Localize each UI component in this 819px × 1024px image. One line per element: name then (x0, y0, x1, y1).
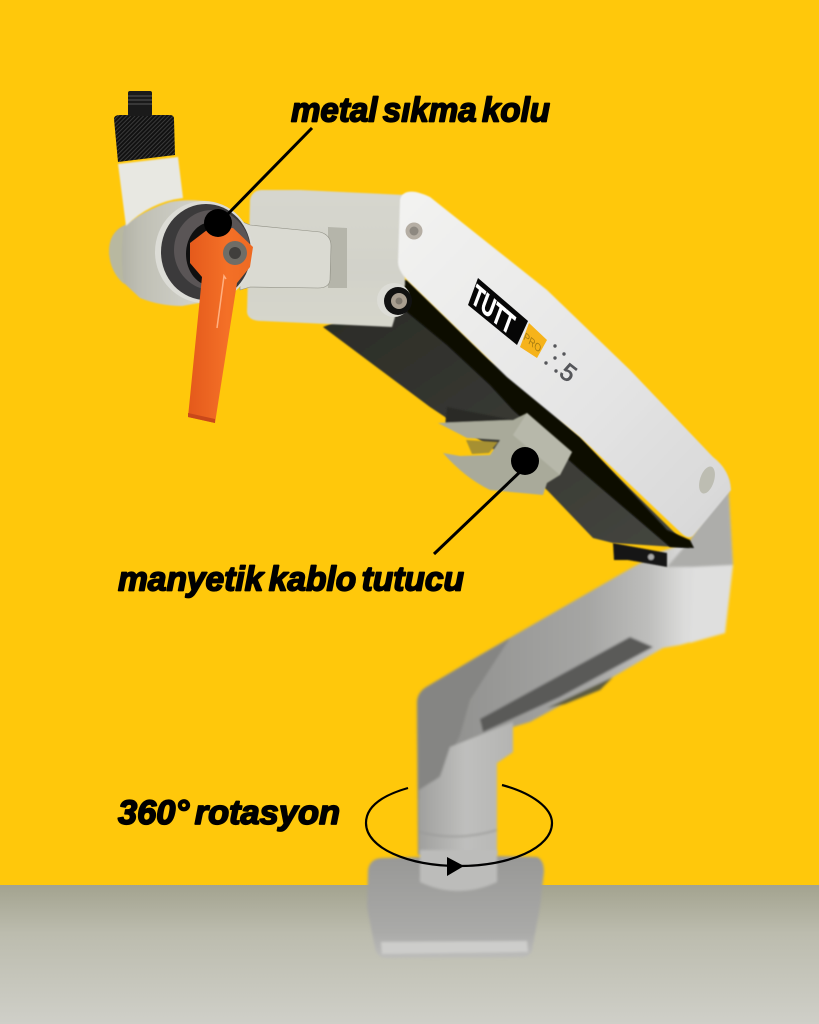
tilt joint cylinder (109, 200, 215, 306)
desk clamp base (367, 850, 544, 958)
marker dot (511, 447, 539, 475)
small bracket below arm (613, 543, 667, 567)
lower arm and column (417, 478, 733, 855)
black strip under white cover (394, 280, 694, 548)
pivot screw (377, 283, 412, 317)
dark underside of upper arm (323, 300, 690, 548)
bracket tongue (240, 221, 331, 290)
knurled knob (114, 115, 175, 162)
bracket slot shadow (328, 227, 347, 288)
logo: TUTT PRO: TUTT (468, 278, 519, 342)
white cover screw (406, 222, 422, 240)
white arm cover (398, 192, 731, 537)
logo: TUTT PRO (468, 278, 547, 358)
magnetic cable holder (438, 407, 572, 495)
rotation ring (366, 785, 552, 866)
table surface (0, 885, 819, 1024)
arm cover end slot (696, 465, 718, 495)
model mark: 5 (544, 344, 581, 388)
rotation arrowhead (447, 857, 464, 876)
label text: 360° rotasyon (118, 794, 340, 832)
logo: TUTT PRO: PRO (522, 331, 542, 356)
model mark: 5: 5 (554, 358, 581, 388)
leader line (222, 128, 312, 220)
clamp bracket (247, 190, 405, 327)
orange clamping lever (188, 228, 253, 423)
marker dot (204, 209, 232, 237)
white block (118, 157, 183, 226)
callout: metal sıkma kolu (204, 92, 550, 237)
monitor arm product (109, 91, 733, 958)
callout: 360° rotasyon (118, 785, 552, 876)
callout: manyetik kablo tutucu (118, 447, 539, 598)
threaded stud (128, 91, 152, 116)
label text: metal sıkma kolu (291, 92, 550, 130)
joint disk (155, 201, 253, 303)
leader line (434, 470, 522, 554)
label text: manyetik kablo tutucu (118, 560, 464, 598)
